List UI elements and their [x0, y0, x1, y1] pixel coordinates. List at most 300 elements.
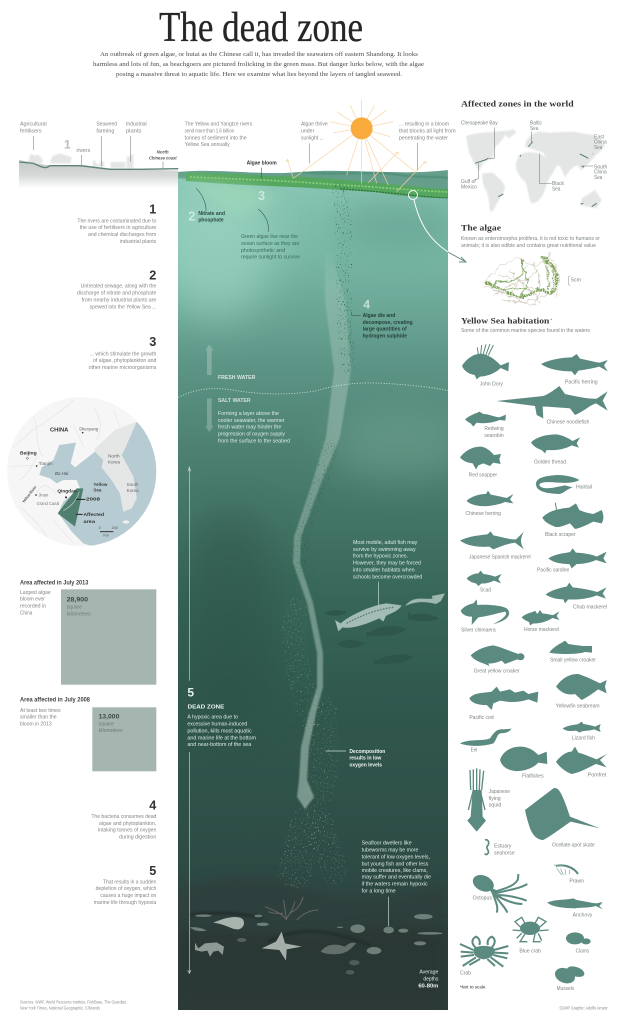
label: algae thrive: sunlight ...	[301, 135, 324, 141]
area 2013 description: Largest algae	[20, 590, 51, 596]
map labels	[20, 427, 139, 525]
label: nitrate and phosphate: 2	[188, 210, 195, 224]
icon: dark fish 5	[374, 654, 413, 666]
species: Anchovy	[547, 898, 603, 918]
species: Estuary seahorse: Estuary	[494, 844, 511, 850]
label: seafloor dwellers: tolerant of low oxygen levels,	[362, 854, 430, 860]
label: industrial plants: plants	[126, 128, 142, 134]
label: resulting bloom: penetrating the water	[399, 135, 448, 141]
label: seaweed farming: Seaweed	[96, 122, 117, 128]
intro text: posing a massive threat to aquatic life. Here we examine what lies beyond the layers of tangled seaweed.	[116, 71, 402, 78]
fish group	[188, 345, 445, 681]
species: Great yellow croaker	[471, 645, 524, 675]
world map labels: Baltic	[530, 120, 542, 126]
world hot spots and leaders	[475, 127, 597, 207]
map labels: Korea	[127, 488, 139, 493]
map labels: Bo Hai	[55, 471, 69, 476]
area 2008 heading: Area affected in July 2008	[20, 697, 91, 703]
icon: sun	[351, 117, 373, 139]
species: Octopus: Octopus	[473, 895, 492, 901]
step 2 text: discharge of nitrate and phosphate	[77, 291, 156, 297]
label: dead zone: pollution, kills most aquatic	[187, 728, 252, 734]
species: Scad	[467, 571, 502, 594]
species: Black scraper: Black scraper	[545, 532, 576, 538]
species: Japanese flying squid: Japanese	[489, 789, 510, 795]
label: nitrate and phosphate: Nitrate and	[198, 211, 225, 217]
label: agricultural fertilisers: fertilisers	[20, 128, 42, 134]
step 4 text: 4	[149, 798, 156, 812]
species: Chinese noodlefish	[497, 386, 608, 425]
area 2013 square: square	[67, 605, 82, 611]
label: algae thrive: under	[301, 128, 314, 134]
map labels: Sea	[93, 488, 102, 493]
map labels: Tianjin	[39, 461, 53, 466]
label: sediment: Yellow Sea annually	[185, 142, 230, 148]
label: salt water	[218, 398, 290, 444]
label: sediment: send more than 1.6 billion	[185, 128, 234, 134]
species: Pacific sardine	[537, 548, 607, 573]
species: Chub mackerel: Chub mackerel	[573, 604, 607, 610]
map labels: North	[108, 453, 120, 458]
step 1 text: the use of fertilisers in agriculture	[80, 225, 156, 231]
step 2 text: Untreated sewage, along with the	[81, 284, 156, 290]
area 2008 description: smaller than the	[20, 715, 57, 721]
panel: right top column	[461, 98, 607, 334]
icon: coral	[265, 897, 318, 920]
area 2013 description: China	[20, 610, 33, 616]
intro text	[93, 51, 424, 78]
panel: sea cross-section	[178, 170, 448, 1010]
label: algae thrive: Algae thrive	[301, 122, 328, 128]
step 5 text: depletion of oxygen, which	[96, 886, 156, 892]
map labels: Qingdao	[57, 489, 77, 495]
world map labels: South	[594, 164, 607, 170]
species: Prawn: Prawn	[569, 879, 584, 885]
label: dead zone: excessive human-induced	[187, 722, 247, 728]
label: salt water: SALT WATER	[218, 398, 251, 404]
label: resulting bloom: ... resulting in a bloom	[399, 122, 449, 128]
label: fresh water: FRESH WATER	[218, 375, 255, 381]
label: green algae: Green algae live near the	[241, 234, 298, 240]
step 5 text: marine life through hypoxia	[94, 900, 157, 906]
label: green algae	[241, 189, 300, 261]
species: Mussels: Mussels	[557, 986, 574, 992]
step 3 text	[89, 335, 156, 371]
area 2013 heading: Area affected in July 2013	[20, 580, 89, 586]
step 4 text	[91, 798, 157, 841]
label: decomposition: oxygen levels	[349, 763, 382, 769]
species: Pacific sardine: Pacific sardine	[537, 567, 569, 573]
species: Pacific herring	[541, 354, 608, 386]
label: seafloor dwellers: for a long time	[362, 888, 396, 894]
label: green algae: require sunlight to survive	[241, 255, 300, 261]
label: average depths	[418, 970, 438, 988]
label: green algae: ocean surface as they are	[241, 241, 299, 247]
label: average depths: depths	[423, 977, 438, 983]
species: Red snapper: Red snapper	[469, 473, 497, 479]
species: Pacific cod	[469, 687, 538, 721]
label: algae die: 4	[363, 297, 370, 311]
heading: yellow sea habitation: *	[550, 317, 552, 322]
label: seafloor dwellers: may suffer and eventually die	[362, 875, 431, 881]
label: average depths: 60-80m	[418, 984, 438, 990]
seafloor creatures	[190, 897, 443, 975]
label: mobile fish: from the hypoxic zones.	[353, 554, 408, 560]
label: algae die: hydrogen sulphide	[363, 334, 407, 340]
algae description: Known as enteromorpha prolifera, it is not toxic to humans or	[461, 236, 600, 242]
map labels: Yellow River	[21, 484, 38, 504]
step 5 text: That results in a sudden	[103, 879, 156, 885]
label: dead zone: A hypoxic area due to	[187, 715, 238, 721]
escape arrow	[405, 593, 445, 606]
world map labels: China	[594, 170, 607, 176]
label group: lower water	[187, 685, 438, 990]
locator map: Yellow Sea	[7, 397, 160, 547]
affected area	[58, 488, 83, 527]
label: decomposition	[326, 749, 386, 769]
arrow: salt water down	[205, 398, 214, 432]
algae bloom layer	[178, 170, 448, 205]
species: Chinese herring	[465, 491, 513, 517]
label: agricultural fertilisers: Agricultural	[20, 122, 47, 128]
step 4 text: during digestion	[119, 835, 156, 841]
species: Chinese herring: Chinese herring	[465, 511, 501, 517]
step 4 text: algae and phytoplankton,	[99, 821, 157, 827]
scale bar: 0	[99, 526, 101, 530]
heading: yellow sea habitation: Yellow Sea habitation	[461, 315, 550, 325]
scale: 5cm	[569, 277, 581, 285]
area 2013 description	[20, 590, 51, 616]
species: Hairtail: Hairtail	[576, 485, 592, 491]
step 2 text	[77, 268, 157, 310]
scale bar: 200	[112, 526, 118, 530]
step 1 text: 1	[149, 202, 156, 216]
label: algae bloom	[247, 160, 277, 178]
species: Scad: Scad	[480, 588, 491, 594]
habitation subtitle: Some of the common marine species found in the waters	[461, 328, 590, 334]
label: seafloor dwellers: tubeworms may be more	[362, 847, 418, 853]
step 3 text: ... which stimulate the growth	[90, 351, 156, 357]
label: decomposition: Decomposition	[349, 749, 386, 755]
species: Eel: Eel	[471, 747, 477, 753]
species: Black scraper	[542, 503, 603, 538]
species: Mussels	[553, 964, 586, 992]
species: Pacific herring: Pacific herring	[565, 380, 598, 386]
label: mobile fish: survive by swimming away	[353, 547, 416, 553]
label: algae die: large quantities of	[363, 327, 407, 333]
species: Estuary seahorse: seahorse	[494, 850, 515, 856]
dotted fresh/salt water boundary	[178, 383, 448, 397]
label: dead zone: and near-bottom of the sea	[187, 742, 252, 748]
species: Redwing searobin: searobin	[484, 433, 504, 439]
map labels: Jinan	[38, 493, 49, 498]
species: Eel	[460, 729, 512, 753]
panel: marine species part 1	[460, 344, 608, 573]
species: Octopus	[470, 872, 527, 913]
icon: shell cluster	[321, 943, 356, 954]
label: north chinese coast: Chinese coast	[149, 155, 177, 160]
callout: algae magnifier	[408, 190, 466, 262]
label: mobile fish: into smaller habitats when	[353, 567, 415, 573]
species: Ocellate spot skate: Ocellate-spot skate	[552, 843, 595, 849]
species: Small yellow croaker: Small yellow croaker	[550, 658, 596, 664]
label: dead zone	[187, 685, 256, 748]
species: John Dory	[462, 344, 509, 387]
icon: tubeworm shell	[213, 917, 244, 929]
step 3 text: of algae, phytoplankton and	[93, 358, 156, 364]
species: Crab	[460, 937, 508, 976]
world map labels: East	[594, 134, 604, 140]
label: agricultural fertilisers	[20, 122, 47, 150]
species: Chinese noodlefish: Chinese noodlefish	[547, 419, 589, 425]
scale bar: Km	[103, 534, 109, 538]
map labels: Beijing	[20, 451, 37, 457]
label: sediment	[185, 122, 252, 148]
icon: farms and factories skyline	[28, 153, 133, 168]
title: The dead zone	[159, 5, 363, 51]
species: Prawn	[554, 865, 584, 885]
map labels: South	[127, 482, 139, 487]
label: salt water: fresh water may hinder the	[218, 425, 281, 431]
intro text: harmless and lots of fun, as beachgoers are pictured frolicking in the green mass. But danger lurks below, with the algae	[93, 61, 424, 68]
label: nitrate and phosphate	[188, 188, 225, 224]
label: seafloor dwellers: mobile creatures, like clams,	[362, 868, 428, 874]
label: seaweed farming	[96, 122, 117, 167]
world map labels: Chesapeake Bay	[461, 120, 498, 126]
label: green algae: 3	[258, 189, 265, 203]
area 2008 description: At least two times	[20, 708, 61, 714]
heading: affected zones: Affected zones in the world	[461, 98, 574, 108]
sources	[20, 1000, 127, 1011]
label: north chinese coast	[149, 149, 177, 168]
label: decomposition: results in low	[349, 756, 382, 762]
label: salt water: cooler seawater, the warmer	[218, 418, 285, 424]
species: Lizard fish: Lizard fish	[572, 735, 595, 741]
label: green algae: photosynthetic and	[241, 248, 285, 254]
label: sediment: The Yellow and Yangtze rivers	[185, 122, 252, 128]
icon: dark fish	[324, 610, 347, 616]
species: Hairtail	[536, 475, 592, 494]
label: resulting bloom	[399, 122, 456, 170]
area 2008 square	[92, 707, 156, 771]
world map labels: China	[594, 140, 607, 146]
world map labels: Sea	[552, 187, 561, 193]
world map labels: Sea	[530, 126, 539, 132]
label: resulting bloom: that blocks all light from	[399, 128, 456, 134]
step 1 text: industrial plants	[120, 239, 156, 245]
label: algae die: decompose, creating	[363, 320, 413, 326]
species: Horse mackerel: Horse mackerel	[524, 627, 559, 633]
label: mobile fish: However, they may be forced	[353, 561, 421, 567]
sources: New York Times, National Geographic, C/Munds	[20, 1006, 101, 1011]
sun and rays	[185, 100, 456, 192]
area 2013 square	[61, 589, 156, 685]
panel: marine species part 2	[460, 571, 607, 780]
species: Yellowfin seabream: Yellowfin seabream	[556, 704, 600, 710]
label: seafloor dwellers: Seafloor dwellers like	[362, 841, 412, 847]
icon: starfish	[262, 932, 302, 961]
step 2 text: from nearby industrial plants are	[82, 298, 156, 304]
species: Pacific cod: Pacific cod	[469, 715, 494, 721]
species: Flatfishes: Flatfishes	[522, 774, 544, 780]
label: rivers	[64, 137, 91, 166]
panel: left lower column	[20, 580, 157, 1011]
species: Japanese flying squid	[467, 768, 510, 832]
species: Crab: Crab	[460, 970, 471, 976]
world map labels: Black	[552, 181, 564, 187]
label: seafloor dwellers	[362, 841, 431, 926]
species: Flatfishes	[500, 747, 547, 780]
species: Red snapper	[460, 447, 501, 479]
label: algae thrive	[301, 122, 328, 163]
label: algae die	[352, 297, 413, 340]
species: Silver chimaera	[461, 599, 509, 633]
step 4 text: intaking tonnes of oxygen	[98, 828, 156, 834]
label: mobile fish: schools become overcrowded	[353, 574, 422, 580]
step 1 text	[77, 202, 157, 245]
world map labels: Sea	[594, 145, 603, 151]
world map labels: Sea	[594, 175, 603, 181]
area 2008 square: kilometres	[99, 728, 123, 734]
species: Anchovy: Anchovy	[573, 912, 592, 918]
species: Ocellate spot skate	[525, 788, 600, 849]
step 5 text	[94, 864, 157, 906]
label: mobile fish: Most mobile, adult fish may	[353, 540, 417, 546]
sources: Sources: WWF, World Resource Institute, FishBase, The Guardian,	[20, 1000, 127, 1005]
label: industrial plants: Industrial	[126, 122, 147, 128]
world map labels	[461, 120, 607, 193]
step 5 text: 5	[149, 864, 156, 878]
species: Lizard fish	[563, 722, 601, 741]
step 4 text: The bacteria consumes dead	[91, 814, 156, 820]
label: mobile fish	[353, 540, 422, 605]
world map labels: Mexico	[461, 184, 477, 190]
species: Silver chimaera: Silver chimaera	[461, 627, 496, 633]
label: seaweed farming: farming	[96, 128, 114, 134]
step 3 text: 3	[149, 335, 156, 349]
area 2008 description	[20, 708, 61, 728]
icon: crab	[195, 942, 224, 957]
credit: SCMP Graphic: Adolfo Arranz	[559, 1005, 608, 1010]
algae description: animals; it is also edible and contains great nutritional value	[461, 243, 596, 249]
area 2013 square: 28,900	[67, 597, 88, 604]
species: Pomfret	[556, 747, 607, 778]
dead zone arrow upper	[188, 467, 191, 681]
label: salt water: from the surface to the seabed	[218, 438, 290, 444]
label: rivers: rivers	[76, 148, 91, 154]
map labels: area	[83, 519, 95, 525]
label: algae bloom: Algae bloom	[247, 160, 277, 166]
sinking algae ribbon	[293, 250, 351, 809]
seafloor	[178, 882, 448, 974]
species: Redwing searobin: Redwing	[484, 426, 504, 432]
label: salt water: progression of oxygen supply	[218, 432, 285, 438]
arrow: dead zone lower	[188, 752, 191, 973]
step 5 text: causes a huge impact on	[100, 893, 156, 899]
species: Golden thread	[531, 434, 580, 466]
label: industrial plants	[126, 122, 147, 162]
sinking particles	[294, 190, 348, 872]
note: not to scale: *Not to scale	[460, 985, 486, 990]
step 2 text: 2	[149, 268, 156, 282]
map labels: Yellow	[93, 482, 108, 487]
label: rivers: 1	[64, 137, 71, 151]
species: Clams	[566, 932, 591, 955]
arrow: fresh water up	[205, 345, 214, 375]
scale: 5cm: 5cm	[571, 278, 581, 284]
map labels: Shenyang	[79, 427, 99, 432]
label: north chinese coast: North	[157, 149, 169, 154]
species: Golden thread: Golden thread	[534, 460, 566, 466]
scale bar	[99, 526, 118, 538]
label: algae die: Algae die and	[363, 313, 396, 319]
species: Blue crab: Blue crab	[519, 948, 541, 954]
intro text: An outbreak of green algae, or hutai as the Chinese call it, has invaded the seawaters off eastern Shandong. It looks	[100, 51, 418, 58]
step 2 text: spewed into the Yellow Sea ...	[90, 304, 157, 310]
world map labels: Gulf of	[461, 179, 476, 185]
label: seafloor dwellers: if the waters remain hypoxic	[362, 882, 428, 888]
panel: land cross-section	[19, 122, 178, 188]
area 2008 square: square	[99, 721, 114, 727]
label: nitrate and phosphate: phosphate	[198, 218, 224, 224]
area 2013 description: recorded in	[20, 603, 46, 609]
label: sediment: tonnes of sediment into the	[185, 135, 247, 141]
species: Horse mackerel	[522, 610, 559, 633]
map labels: Grand Canal	[37, 501, 59, 506]
label group: upper water	[188, 188, 413, 381]
species: John Dory: John Dory	[480, 381, 503, 387]
species: Yellowfin seabream	[556, 674, 607, 710]
species: Japanese Spanish mackerel: Japanese Spanish mackerel	[469, 554, 531, 560]
species: Clams: Clams	[576, 949, 589, 955]
label: seafloor dwellers: but young fish and other less	[362, 861, 428, 867]
label: average depths: Average	[419, 970, 438, 976]
species: Japanese flying squid: squid	[489, 803, 501, 809]
label: dead zone: and marine life at the bottom	[187, 735, 256, 741]
algae description	[461, 236, 600, 249]
step 1 text: The rivers are contaminated due to	[77, 218, 156, 224]
species: Redwing searobin	[465, 412, 506, 439]
species: Pomfret: Pomfret	[588, 772, 607, 778]
label: dead zone: DEAD ZONE	[188, 704, 225, 710]
species: Chub mackerel	[546, 583, 607, 610]
icon: small shells	[190, 914, 443, 975]
icon: silver mackerel	[335, 603, 402, 631]
species: Small yellow croaker	[549, 641, 596, 664]
area 2013 square: kilometres	[67, 611, 91, 617]
icon: dark fish 3	[367, 626, 406, 638]
step 1 text: and chemical discharges from	[88, 232, 157, 238]
world map	[466, 129, 605, 212]
map labels: Korea	[108, 459, 121, 464]
icon: dark fish 2	[408, 612, 439, 621]
panel: marine species part 3	[460, 768, 608, 1010]
area 2013 description: bloom ever	[20, 597, 45, 603]
map labels: CHINA	[50, 427, 68, 433]
species: Estuary seahorse	[485, 840, 515, 856]
map labels: Affected	[83, 512, 104, 518]
icon: dark fish 4	[337, 640, 365, 648]
heading: the algae: The algae	[461, 222, 501, 232]
icon: tangled algae	[483, 253, 560, 307]
species: Japanese flying squid: flying	[489, 796, 501, 802]
species: Great yellow croaker: Great yellow croaker	[474, 669, 520, 675]
coast line	[19, 162, 178, 169]
label: dead zone: 5	[187, 685, 194, 699]
label: salt water: Forming a layer above the	[218, 411, 279, 417]
species: Blue crab	[513, 917, 549, 954]
species: Japanese Spanish mackerel	[460, 531, 531, 560]
